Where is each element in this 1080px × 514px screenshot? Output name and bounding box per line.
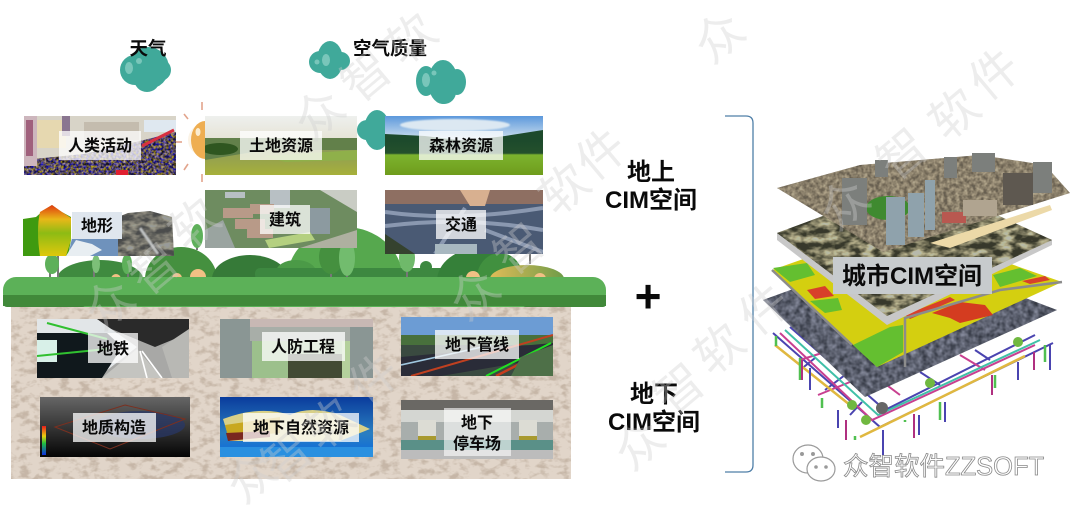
watermark brand: 众智软件ZZSOFT: [843, 453, 1044, 481]
cloud: air quality left: [309, 41, 350, 79]
watermark: repeated text: 软: [685, 314, 755, 386]
icon: sun: [176, 102, 220, 182]
watermark: repeated text: 众: [440, 259, 510, 331]
watermark: repeated text: 众: [685, 2, 755, 74]
watermark: repeated text: 智: [868, 119, 938, 191]
layer: terrain: [777, 180, 1052, 325]
watermark: repeated text: 智: [485, 214, 555, 286]
watermark: repeated text: 众: [217, 442, 287, 514]
watermark: repeated text: 件: [960, 39, 1030, 111]
layer: city model: [777, 153, 1070, 252]
watermark: repeated text: 软: [530, 154, 600, 226]
photo: buildings: [205, 190, 357, 248]
city CIM stack: [763, 153, 1070, 455]
photo: natural resources: [220, 397, 373, 457]
watermark: repeated text: 件: [567, 119, 637, 191]
photo: civil defense: [220, 319, 373, 378]
photo: natural resources: 地下自然资源: [253, 418, 349, 437]
watermark: repeated text: 件: [340, 344, 410, 416]
cloud: air quality right: [416, 60, 466, 104]
plus sign: +: [635, 270, 661, 322]
layer: pipe network: [773, 327, 1053, 455]
label: city CIM space: 城市CIM空间: [842, 262, 982, 290]
photo: terrain: 地形: [81, 217, 113, 235]
title: weather: 天气: [129, 38, 167, 59]
photo: underground pipelines: [401, 317, 553, 376]
photo: forest resources: [385, 116, 543, 175]
watermark: repeated text: 智: [645, 354, 715, 426]
photo: geological structure: 地质构造: [82, 418, 146, 437]
photo: land resources: 土地资源: [249, 137, 313, 155]
photo: forest resources: 森林资源: [429, 137, 493, 155]
ground bar: [3, 277, 606, 307]
photo: underground pipelines: 地下管线: [445, 335, 509, 354]
title: air quality: 空气质量: [353, 38, 427, 59]
photo: underground parking: 停车场: [453, 434, 501, 453]
heading: underground: CIM空间: [608, 409, 700, 436]
scenery: hills and trees: [45, 224, 564, 333]
watermark: repeated text: 智: [120, 234, 190, 306]
watermark: repeated text: 软: [377, 4, 447, 76]
heading: underground: [608, 381, 700, 436]
layer: satellite: [763, 250, 1057, 397]
photo: subway: [37, 319, 189, 378]
watermark: repeated text: 众: [75, 269, 145, 341]
cloud: weather: [120, 47, 171, 92]
layer: land use: [772, 225, 1062, 367]
heading: above ground: 地上: [627, 159, 675, 186]
photo: buildings: 建筑: [269, 210, 301, 229]
photo: terrain: [23, 205, 174, 256]
heading: underground: 地下: [630, 381, 678, 408]
photo: underground parking: 地下: [461, 414, 493, 432]
watermark: repeated text: 软: [295, 389, 365, 461]
watermark: repeated text: 众: [605, 409, 675, 481]
soil panel: [11, 307, 571, 479]
heading: above ground: CIM空间: [605, 187, 697, 214]
label: city CIM space: [833, 257, 992, 294]
watermark: repeated text: 软: [160, 189, 230, 261]
watermark: repeated text: 众: [285, 79, 355, 151]
photo: human activity: [24, 116, 176, 175]
watermark: repeated text: 软: [920, 79, 990, 151]
heading: above ground: [605, 159, 697, 214]
watermark: repeated text: 智: [253, 422, 323, 494]
photo: traffic: 交通: [445, 215, 477, 234]
cloud: behind forest photo: [357, 110, 390, 150]
photo: civil defense: 人防工程: [271, 337, 335, 356]
photo: human activity: 人类活动: [68, 137, 132, 155]
bracket: [725, 116, 753, 472]
icon: wechat logo: [793, 445, 835, 481]
photo: traffic: [385, 190, 543, 254]
watermark: repeated text: 众: [810, 169, 880, 241]
watermark: repeated text: 件: [730, 274, 800, 346]
photo: subway: 地铁: [97, 340, 129, 358]
watermark: repeated text: 智: [332, 41, 402, 113]
photo: underground parking: [401, 400, 553, 459]
photo: land resources: [202, 116, 357, 175]
photo: geological structure: [40, 397, 190, 457]
